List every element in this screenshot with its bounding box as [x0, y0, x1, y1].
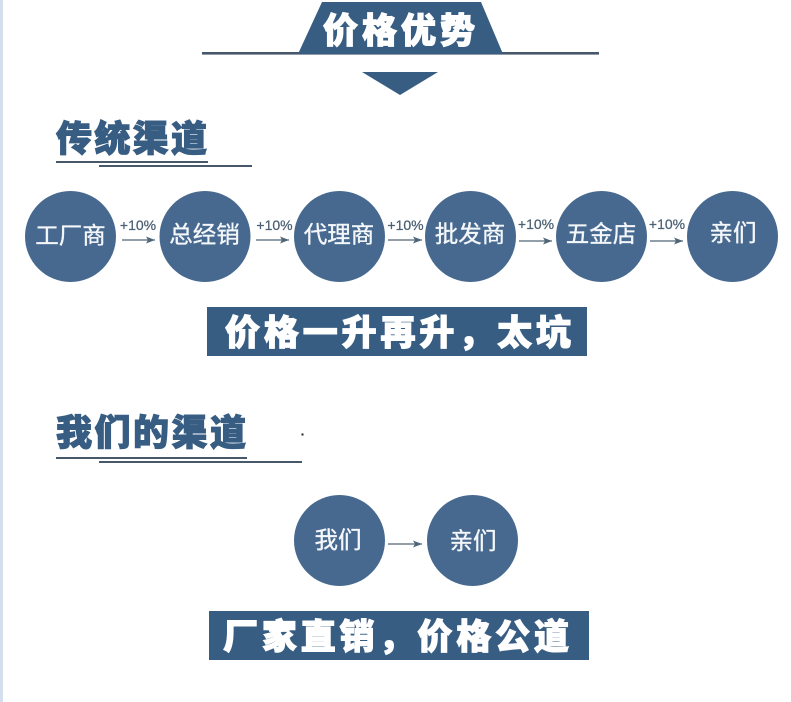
heading: traditional channel: 传统渠道	[56, 118, 207, 159]
node: agent: 代理商	[304, 222, 374, 248]
markup arrow 5: +10%	[649, 216, 685, 232]
flow: traditional channel	[25, 191, 778, 282]
markup arrow 1: +10%	[120, 217, 156, 233]
markup arrow 2	[256, 217, 293, 240]
node: us: 我们	[314, 527, 362, 553]
node: customers	[427, 495, 518, 586]
node: distributor: 总经销	[169, 222, 240, 248]
node: customers: 亲们	[450, 528, 496, 554]
node: agent	[294, 191, 385, 282]
node: factory: 工厂商	[35, 222, 106, 248]
node: wholesaler: 批发商	[435, 221, 505, 247]
flow: our channel	[294, 495, 518, 586]
node: hardware store: 五金店	[566, 221, 636, 247]
markup arrow 1	[120, 217, 156, 240]
direct arrow	[388, 543, 422, 545]
node: customers	[687, 191, 778, 282]
title banner	[202, 2, 599, 55]
heading: our channel: 我们的渠道	[56, 412, 246, 453]
markup arrow 4: +10%	[518, 216, 554, 232]
node: us	[294, 495, 385, 586]
title text: 价格优势	[323, 12, 475, 51]
node: wholesaler	[425, 191, 516, 282]
markup arrow 4	[518, 216, 554, 241]
node: factory	[25, 191, 116, 282]
node: distributor	[160, 191, 250, 282]
markup arrow 5	[649, 216, 685, 241]
markup arrow 3: +10%	[387, 217, 424, 233]
markup arrow 3	[387, 217, 424, 240]
icon: down triangle	[362, 72, 438, 95]
node: customers: 亲们	[710, 220, 756, 246]
callout: price keeps rising: 价格一升再升，太坑	[225, 313, 571, 353]
callout: factory direct: 厂家直销，价格公道	[223, 617, 569, 657]
node: hardware store	[556, 191, 647, 282]
markup arrow 2: +10%	[256, 217, 293, 233]
